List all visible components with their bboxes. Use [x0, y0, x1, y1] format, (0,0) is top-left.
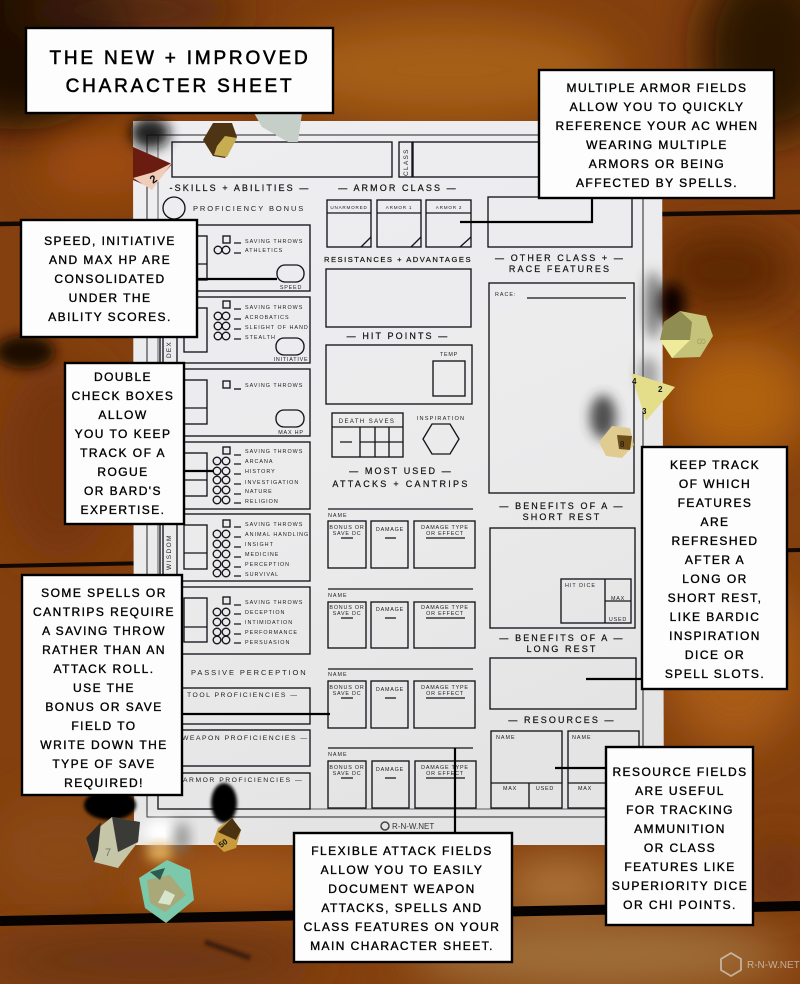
attack row 1: SAVE DC	[333, 531, 361, 537]
heading: benefits of a long rest	[499, 633, 625, 654]
heading: other class and race features	[495, 253, 625, 274]
attack row 2: DAMAGE TYPE	[421, 605, 469, 611]
attack row 1	[328, 509, 475, 568]
callout: features refreshed on rests	[642, 447, 787, 689]
heading: skills and abilities: -SKILLS + ABILITIES —	[170, 183, 310, 193]
ability panel: constitution: SAVING THROWS	[245, 383, 303, 389]
callout: features refreshed on rests: AFTER A	[685, 553, 745, 567]
callout: flexible attack fields: ALLOW YOU TO EASILY	[321, 863, 483, 877]
callout: double check boxes: CHECK BOXES	[72, 389, 174, 403]
die: pale yellow d12	[660, 311, 713, 358]
die: green d20	[139, 860, 194, 923]
callout: features refreshed on rests: ARE	[700, 515, 730, 529]
ability panel: charisma	[163, 587, 310, 654]
callout: flexible attack fields: MAIN CHARACTER SHEET.	[310, 939, 494, 953]
callout: saving throws: ATTACK ROLL.	[54, 662, 154, 676]
callout: double check boxes: ROGUE	[97, 465, 149, 479]
die: small gold d12: 8	[620, 440, 625, 449]
callout: resource fields: OR CLASS	[644, 841, 716, 855]
callout: features refreshed on rests: LONG OR	[682, 572, 748, 586]
heading: benefits of a short rest	[499, 501, 625, 522]
callout: features refreshed on rests: SHORT REST,	[668, 591, 762, 605]
heading: benefits of a short rest: — BENEFITS OF A —	[499, 501, 625, 511]
callout: saving throws: BONUS OR SAVE	[45, 700, 163, 714]
callout: speed, initiative, max hp: SPEED, INITIATIVE	[44, 234, 176, 248]
callout: double check boxes: EXPERTISE.	[81, 503, 165, 517]
die: clear	[254, 113, 302, 142]
die: red and pink d10: 2	[148, 173, 160, 186]
attack row 3: SAVE DC	[333, 691, 361, 697]
inspiration	[417, 416, 465, 454]
ability panel: dexterity: SLEIGHT OF HAND	[245, 325, 309, 331]
die: small gold d12	[599, 426, 634, 458]
callout: resource fields: FEATURES LIKE	[624, 860, 736, 874]
resistances and advantages: RESISTANCES + ADVANTAGES	[324, 255, 472, 264]
heading: most used attacks and cantrips: ATTACKS + CANTRIPS	[332, 479, 470, 489]
callout: flexible attack fields: FLEXIBLE ATTACK FIELDS	[311, 844, 493, 858]
resource box 1: USED	[536, 786, 554, 792]
callout: saving throws: RATHER THAN AN	[42, 643, 166, 657]
resource box 1	[491, 731, 562, 808]
weapon proficiencies field	[163, 730, 310, 766]
ability panel: wisdom: WISDOM	[166, 534, 173, 570]
resource box 2	[568, 731, 639, 808]
heading: other class and race features: — OTHER CLASS + —	[495, 253, 625, 263]
ability panel: intelligence: HISTORY	[245, 469, 276, 475]
callout: resource fields: SUPERIORITY DICE	[612, 879, 748, 893]
ability panel: dexterity: STEALTH	[245, 335, 276, 341]
callout: double check boxes	[65, 363, 184, 524]
callout: resource fields: RESOURCE FIELDS	[612, 765, 748, 779]
attack row 4: DAMAGE	[376, 767, 404, 773]
attack row 1: BONUS OR	[329, 525, 365, 531]
callout: multiple armor fields: ALLOW YOU TO QUICKLY	[570, 100, 744, 114]
ability panel: strength: ATHLETICS	[245, 248, 283, 254]
ability panel: intelligence: NATURE	[245, 489, 273, 495]
callout: resource fields	[606, 747, 753, 925]
attack row 4: BONUS OR	[329, 765, 365, 771]
watermark logo	[721, 953, 800, 976]
inspiration: INSPIRATION	[417, 416, 465, 422]
callout: features refreshed on rests: INSPIRATION	[669, 629, 761, 643]
ability panel: dexterity: SAVING THROWS	[245, 305, 303, 311]
title callout: CHARACTER SHEET	[66, 76, 294, 97]
attack row 2: OR EFFECT	[426, 611, 464, 617]
heading: armor class: — ARMOR CLASS —	[338, 183, 458, 193]
hit points: TEMP	[440, 352, 458, 358]
armor class boxes: ARMOR 1	[386, 205, 412, 210]
ability panel: wisdom: PERCEPTION	[245, 562, 290, 568]
callout: features refreshed on rests: LIKE BARDIC	[670, 610, 760, 624]
ability panel: intelligence: SAVING THROWS	[245, 449, 303, 455]
attack row 3: DAMAGE TYPE	[421, 685, 469, 691]
ability panel: wisdom: ANIMAL HANDLING	[245, 532, 309, 538]
callout: saving throws: CANTRIPS REQUIRE	[33, 605, 175, 619]
callout: saving throws: TYPE OF SAVE	[52, 757, 156, 771]
callout: double check boxes: OR BARD'S	[84, 484, 162, 498]
death saves: DEATH SAVES	[339, 419, 395, 425]
attack row 1: DAMAGE TYPE	[421, 525, 469, 531]
callout: speed, initiative, max hp: CONSOLIDATED	[54, 272, 166, 286]
callout: features refreshed on rests: OF WHICH	[679, 477, 751, 491]
heading: benefits of a long rest: — BENEFITS OF A —	[499, 633, 625, 643]
die: yellow d4: 2	[658, 385, 663, 394]
character sheet paper	[133, 121, 664, 845]
attack row 3: OR EFFECT	[426, 691, 464, 697]
callout: double check boxes: YOU TO KEEP	[75, 427, 171, 441]
callout: multiple armor fields: ARMORS OR BEING	[589, 157, 725, 171]
callout: features refreshed on rests: FEATURES	[678, 496, 752, 510]
callout: features refreshed on rests: REFRESHED	[671, 534, 759, 548]
callout: saving throws: WRITE DOWN THE	[40, 738, 168, 752]
armor class boxes	[327, 200, 471, 247]
ability panel: charisma: SAVING THROWS	[245, 600, 303, 606]
hit points	[326, 331, 472, 404]
callout: double check boxes: ALLOW	[98, 408, 148, 422]
connector lines	[182, 198, 642, 833]
callout: flexible attack fields: DOCUMENT WEAPON	[328, 882, 476, 896]
callout: double check boxes: DOUBLE	[94, 370, 152, 384]
ability panel: wisdom	[160, 514, 310, 581]
long rest box	[490, 658, 636, 709]
attack row 2: DAMAGE	[376, 607, 404, 613]
die: red and pink d10	[133, 147, 172, 190]
callout: double check boxes: TRACK OF A	[80, 446, 166, 460]
heading: benefits of a long rest: LONG REST	[527, 644, 597, 654]
callout: multiple armor fields	[539, 70, 774, 198]
die: yellow d4	[631, 373, 675, 421]
title callout	[26, 28, 333, 113]
heading: most used attacks and cantrips: — MOST USED —	[349, 466, 453, 476]
callout: resource fields: OR CHI POINTS.	[623, 898, 737, 912]
ability panel: strength: SPEED	[280, 285, 302, 291]
callout: resource fields: ARE USEFUL	[635, 784, 725, 798]
ability panel: dexterity: DEX	[166, 341, 173, 358]
callout: speed, initiative, max hp	[21, 220, 197, 337]
attack row 4: SAVE DC	[333, 771, 361, 777]
ability panel: charisma: INTIMIDATION	[245, 620, 293, 626]
ability panel: dexterity: INITIATIVE	[274, 357, 308, 363]
attack row 1: NAME	[328, 513, 348, 519]
attack row 4: DAMAGE TYPE	[421, 765, 469, 771]
heading: other class and race features: RACE FEATURES	[509, 264, 611, 274]
attack row 3: DAMAGE	[376, 687, 404, 693]
callout: flexible attack fields	[294, 833, 512, 962]
tool proficiencies field	[163, 688, 310, 724]
ability panel: intelligence: INVESTIGATION	[245, 480, 299, 486]
ability panel: charisma: DECEPTION	[245, 610, 285, 616]
attack row 4	[328, 748, 476, 808]
callout: resource fields: FOR TRACKING	[626, 803, 734, 817]
armor class boxes: ARMOR 2	[436, 205, 462, 210]
ability panel: wisdom: INSIGHT	[245, 542, 274, 548]
ability panel: strength	[163, 225, 310, 291]
name field	[172, 142, 392, 177]
armor class boxes: UNARMORED	[330, 205, 368, 210]
attack row 1: OR EFFECT	[426, 531, 464, 537]
race features box	[489, 283, 634, 493]
class field	[399, 142, 543, 177]
callout: speed, initiative, max hp: AND MAX HP ARE	[49, 253, 171, 267]
attack row 2: SAVE DC	[333, 611, 361, 617]
footer logo: R-N-W.NET	[392, 822, 434, 831]
callout: multiple armor fields: REFERENCE YOUR AC WHEN	[555, 119, 759, 133]
short rest box with hit dice: USED	[609, 617, 627, 623]
callout: multiple armor fields: MULTIPLE ARMOR FIELDS	[567, 81, 747, 95]
die: small gold bottom: 50	[217, 837, 230, 850]
proficiency bonus: PROFICIENCY BONUS	[193, 204, 305, 213]
die: pale yellow d12: 8	[694, 338, 708, 345]
watermark logo: R-N-W.NET	[747, 960, 800, 971]
callout: saving throws: SOME SPELLS OR	[41, 586, 167, 600]
resource box 1: NAME	[496, 735, 516, 741]
ability panel: constitution	[163, 369, 310, 436]
ability panel: constitution: MAX HP	[278, 430, 304, 436]
callout: saving throws: A SAVING THROW	[42, 624, 166, 638]
ability panel: wisdom: SURVIVAL	[245, 572, 279, 578]
callout: flexible attack fields: ATTACKS, SPELLS AND	[321, 901, 483, 915]
passive perception label: PASSIVE PERCEPTION	[191, 668, 308, 677]
die: grey d10: 7	[105, 847, 111, 859]
die: gold	[203, 123, 237, 158]
attack row 1: DAMAGE	[376, 527, 404, 533]
callout: features refreshed on rests: DICE OR	[685, 648, 745, 662]
attack row 3: BONUS OR	[329, 685, 365, 691]
callout: multiple armor fields: WEARING MULTIPLE	[586, 138, 728, 152]
callout: flexible attack fields: CLASS FEATURES ON YOUR	[304, 920, 500, 934]
ability panel: intelligence: RELIGION	[245, 499, 279, 505]
die: yellow d4: 3	[642, 407, 647, 416]
class field: CLASS	[403, 148, 410, 176]
ability panel: intelligence	[163, 442, 310, 509]
callout: features refreshed on rests: KEEP TRACK	[670, 458, 760, 472]
ability panel: dexterity	[160, 297, 310, 364]
attack row 2: BONUS OR	[329, 605, 365, 611]
callout: saving throws	[22, 575, 182, 795]
proficiency bonus	[163, 197, 305, 219]
attack row 4: NAME	[328, 752, 348, 758]
ability panel: wisdom: MEDICINE	[245, 552, 279, 558]
attack row 4: OR EFFECT	[426, 771, 464, 777]
tool proficiencies field: TOOL PROFICIENCIES —	[187, 692, 299, 699]
spell field box	[488, 197, 632, 247]
callout: saving throws: USE THE	[73, 681, 135, 695]
short rest box with hit dice: HIT DICE	[565, 583, 596, 589]
armor proficiencies field	[158, 773, 310, 809]
title callout: THE NEW + IMPROVED	[49, 48, 311, 69]
callout: features refreshed on rests: SPELL SLOTS.	[665, 667, 765, 681]
heading: resources: — RESOURCES —	[508, 715, 616, 725]
callout: speed, initiative, max hp: UNDER THE	[69, 291, 151, 305]
die: yellow d4: 4	[632, 377, 637, 386]
weapon proficiencies field: WEAPON PROFICIENCIES —	[182, 735, 309, 742]
hit points: — HIT POINTS —	[347, 331, 449, 341]
ability panel: intelligence: ARCANA	[245, 459, 273, 465]
callout: resource fields: AMMUNITION	[634, 822, 726, 836]
ability panel: charisma: PERFORMANCE	[245, 630, 298, 636]
callout: saving throws: REQUIRED!	[64, 776, 144, 790]
race features box: RACE:	[495, 292, 516, 298]
callout: multiple armor fields: AFFECTED BY SPELLS.	[576, 176, 738, 190]
heading: benefits of a short rest: SHORT REST	[523, 512, 601, 522]
ability panel: dexterity: ACROBATICS	[245, 315, 290, 321]
heading: most used attacks and cantrips	[332, 466, 470, 489]
ability panel: wisdom: SAVING THROWS	[245, 522, 303, 528]
die: grey d10	[86, 817, 140, 868]
short rest box with hit dice	[490, 528, 635, 628]
die shadows	[84, 117, 685, 861]
resource box 1: MAX	[503, 786, 517, 792]
callout: saving throws: FIELD TO	[71, 719, 137, 733]
armor proficiencies field: ARMOR PROFICIENCIES —	[183, 777, 303, 784]
resistances and advantages	[324, 255, 472, 327]
attack row 3: NAME	[328, 672, 348, 678]
die: small gold bottom	[213, 818, 241, 852]
resource box 2: MAX	[578, 786, 592, 792]
ability panel: strength: SAVING THROWS	[245, 239, 303, 245]
death saves	[332, 413, 403, 457]
attack row 3	[328, 669, 475, 728]
ability panel: charisma: PERSUASION	[245, 640, 290, 646]
short rest box with hit dice: MAX	[611, 596, 625, 602]
resource box 2: NAME	[572, 735, 592, 741]
callout: speed, initiative, max hp: ABILITY SCORES.	[48, 310, 172, 324]
attack row 2: NAME	[328, 593, 348, 599]
attack row 2	[328, 589, 475, 648]
